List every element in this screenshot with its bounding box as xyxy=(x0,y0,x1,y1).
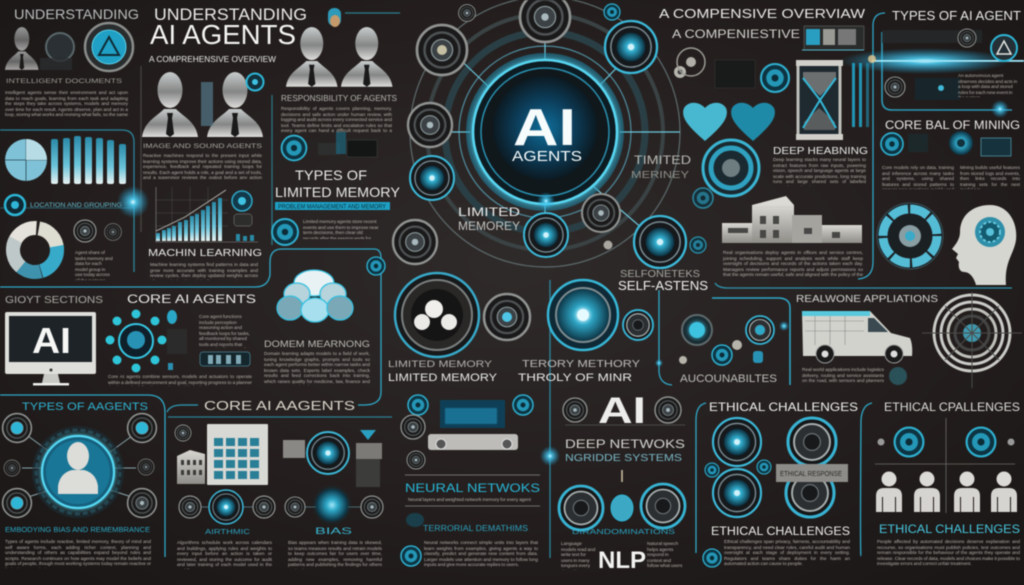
headings: RESPONSIBILITY OF AGENTS xyxy=(281,93,397,103)
top-right inset panel xyxy=(882,29,1017,100)
headings: UNDERSTANDING xyxy=(14,6,139,22)
hub label xyxy=(512,99,582,165)
van xyxy=(802,311,912,385)
headings: CORE AI AGENTS xyxy=(127,292,256,306)
headings: SELFONETEKS xyxy=(620,268,700,280)
headings: AI AGENTS xyxy=(150,19,296,50)
headings: THROLY OF MINR xyxy=(518,372,632,384)
headings: DOMEM MEARNONG xyxy=(264,339,370,349)
bottom centre large rings xyxy=(395,273,653,357)
hub label: AI xyxy=(513,99,576,157)
headings: REALWONE APPLIATIONS xyxy=(796,294,938,305)
cyan band xyxy=(275,202,390,210)
left panel: pie and bars xyxy=(5,136,126,184)
headings: TERRORIAL DEMATHIMS xyxy=(423,524,528,533)
headings: NLP xyxy=(598,547,646,574)
headings: A COMPENIESTIVE xyxy=(672,27,800,41)
bar chart xyxy=(156,187,258,242)
core agent small chips xyxy=(167,310,250,370)
headings: BIAS xyxy=(315,526,352,536)
large cyan dial xyxy=(690,140,759,253)
headings: GIOYT SECTIONS xyxy=(5,295,103,306)
hub satellites xyxy=(393,0,686,268)
donut chart xyxy=(4,219,66,281)
AI deep network rings xyxy=(559,397,685,530)
top-left profile and badge xyxy=(5,23,133,71)
agent persona hub xyxy=(3,414,156,518)
headings: LIMITED MEMORY xyxy=(388,359,492,369)
central bias device xyxy=(283,430,382,487)
cyan icon xyxy=(272,219,298,245)
headings: INTELLIGENT DOCUMENTS xyxy=(6,78,123,85)
headings: AUCOUNABILTES xyxy=(680,373,777,385)
left panel: cyan label row: LOCATION AND GROUPING xyxy=(30,202,122,209)
headings: TIMITED xyxy=(634,153,691,167)
laptop device xyxy=(401,395,540,566)
headings: AIRTHMIC xyxy=(205,529,250,536)
headings: DIRANDOMINATIONS xyxy=(572,529,675,536)
headings: TYPES OF AAGENTS xyxy=(22,401,148,413)
headings: LIMITED MEMORY xyxy=(275,184,401,200)
headings: TYPES OF xyxy=(295,167,367,183)
hearts xyxy=(683,103,775,141)
concentric target xyxy=(922,292,1022,388)
headings: MERINEY xyxy=(631,170,689,181)
headings: ETHICAL CHALLENGES xyxy=(879,524,1020,536)
wheel xyxy=(877,203,943,269)
gear icon xyxy=(106,310,166,372)
accountabilities cluster xyxy=(679,315,774,365)
text block: ethical right: People affected by automated decisions deserve explanation and recourse, so organisations must publish policies, test outcomes and remain responsible for the behaviour of the agents they operate and release. Clear records of data, models and choices make it possible to investigate errors and correct unfair treatment. xyxy=(877,539,1020,566)
headings: NEURAL NETWOKS xyxy=(405,481,540,495)
text block: neural subtitle: Neural layers and weighted network memory for every agent xyxy=(408,497,531,502)
small donut side icons xyxy=(74,220,121,242)
ethical challenge rings xyxy=(703,418,848,567)
left panel: cyan label row xyxy=(5,195,122,215)
headings: SELF-ASTENS xyxy=(618,278,708,293)
headings: DEEP HEABNING xyxy=(773,145,868,157)
headings: AI xyxy=(598,390,646,431)
headings: A COMPREHENSIVE OVERVIEW xyxy=(149,55,276,64)
headings: TERORY METHORY xyxy=(522,358,640,370)
headings: MEMOREY xyxy=(458,219,520,233)
headings: NGRIDDE SYSTEMS xyxy=(565,453,682,464)
cloud cluster xyxy=(277,270,353,322)
hourglass xyxy=(796,60,843,140)
headings: EMBODYING BIAS AND REMEMBRANCE xyxy=(5,525,150,534)
headings: IMAGE AND SOUND AGENTS xyxy=(143,143,263,150)
cyan band: PROBLEM MANAGEMENT AND MEMORY xyxy=(278,204,386,210)
headings: MACHIN LEARNING xyxy=(148,247,262,259)
ethical persons panel xyxy=(875,418,1017,513)
small connector icon xyxy=(367,257,385,275)
top-right cluster icons xyxy=(677,26,864,92)
monitor with AI xyxy=(5,312,96,386)
headings: CORE AI AAGENTS xyxy=(204,398,355,413)
persons pair xyxy=(142,72,264,137)
headings: CORE BAL OF MINING xyxy=(885,118,1020,132)
memory row icons xyxy=(282,132,377,160)
cyan bars xyxy=(852,63,869,127)
central AI agents hub xyxy=(410,0,680,267)
monitor with AI: AI xyxy=(32,320,71,361)
text block: ethical left: Ethical challenges span privacy, fairness, accountability and transparency, and need clear rules, careful audit and human oversight at each stage of deployment in every setting. Regulators and teams share duties for the harm an automated action can cause to people. xyxy=(724,539,850,566)
headings: LIMITED MEMORY xyxy=(388,372,498,384)
text block: neural: Neural networks connect simple units into layers that learn weights from examples, giving agents a way to classify, predict and generate new content from data. Larger models use attention and memory to follow long inputs and give more accurate replies to users. xyxy=(424,540,538,567)
core agents ring row right xyxy=(285,489,383,521)
headings: UNDERSTANDING xyxy=(154,5,307,24)
calendar grid panel xyxy=(175,424,268,485)
hub label: AGENTS xyxy=(512,148,582,165)
headings: DEEP NETWOKS xyxy=(565,437,685,451)
head profile xyxy=(952,205,1016,285)
headings: LIMITED xyxy=(458,205,520,219)
headings: TYPES OF AI AGENT xyxy=(892,9,1021,23)
headings: ETHICAL CPALLENGES xyxy=(884,400,1020,414)
headings: A COMPENSIVE OVERVIAW xyxy=(659,6,866,21)
building xyxy=(722,196,862,243)
light flares xyxy=(117,48,1024,466)
core ball icons xyxy=(881,131,1011,156)
headings: ETHICAL CHALLENGES xyxy=(711,526,850,538)
core agents ring row left xyxy=(179,490,275,524)
ethical challenge rings: ETHICAL RESPONSE xyxy=(780,471,842,478)
persons pair top right of left column xyxy=(286,8,393,87)
headings: ETHICAL CHALLENGES xyxy=(709,400,858,414)
